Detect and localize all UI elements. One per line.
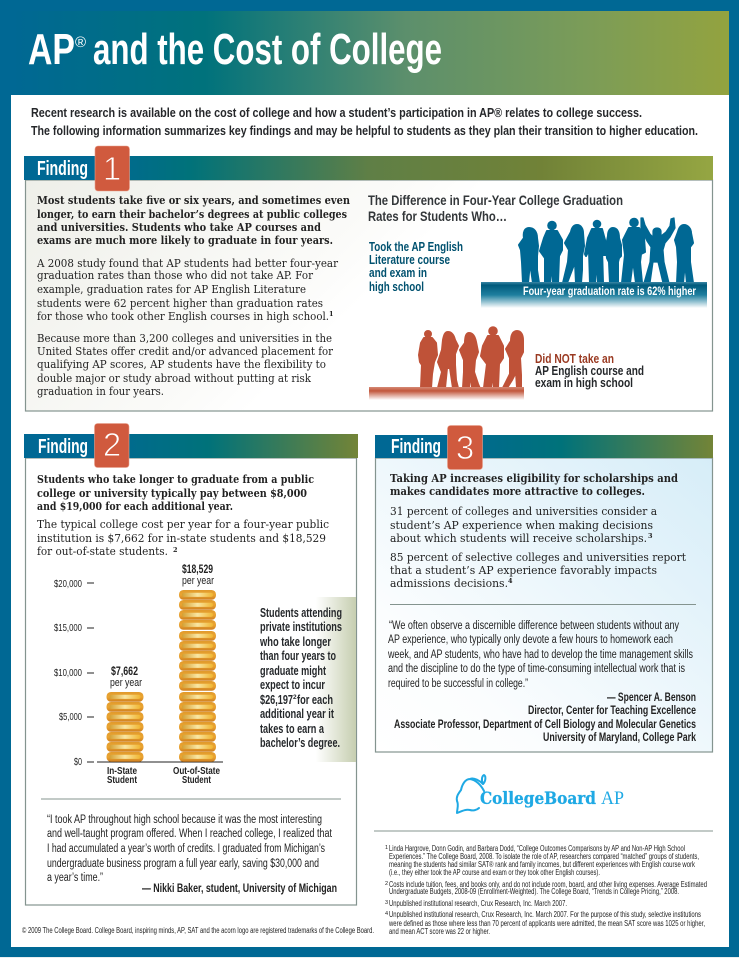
student quote: I had accumulated a year’s worth of credits. I graduated from Michigan’s xyxy=(47,843,325,855)
intro text xyxy=(31,105,698,138)
blue silhouettes of AP students xyxy=(519,218,693,283)
finding 2 label: Finding xyxy=(38,436,88,458)
finding 1 text: Because more than 3,200 colleges and universities in the xyxy=(37,332,332,345)
callout: private institutions: private institutions xyxy=(260,620,342,634)
y axis labels: $20,000 xyxy=(54,578,82,590)
finding 2 text: for out-of-state students. xyxy=(37,545,168,558)
red silhouettes of non-AP students xyxy=(419,327,523,392)
finding 1 text: and universities. Students who take AP courses and xyxy=(37,221,321,234)
header banner: and the Cost of College xyxy=(93,25,442,74)
footnotes: 4 xyxy=(385,911,388,917)
copyright line: © 2009 The College Board. College Board, inspiring minds, AP, SAT and the acorn logo are registered trademarks of the College Board. xyxy=(22,926,374,935)
finding 3 text: makes candidates more attractive to colleges. xyxy=(390,485,645,498)
label: took AP: and exam in xyxy=(369,265,427,280)
student quote: undergraduate business program a full year early, saving $30,000 and xyxy=(47,858,319,870)
out-of-state value xyxy=(182,562,214,587)
finding 3 number badge: 3 xyxy=(456,429,474,466)
callout: private institutions xyxy=(255,597,356,762)
label: did not take AP xyxy=(535,351,644,390)
blue graduation rate bar xyxy=(481,282,707,308)
callout: private institutions: $26,197 xyxy=(260,693,293,707)
header banner xyxy=(11,11,729,95)
y axis labels: $10,000 xyxy=(54,667,82,679)
finding 3 text: admissions decisions. xyxy=(390,577,508,590)
y axis labels xyxy=(54,578,82,768)
graduation graphic heading xyxy=(368,192,623,224)
x axis labels: Out-of-State xyxy=(173,765,220,777)
finding 1 text: double major or study abroad without putting at risk xyxy=(37,372,311,385)
in-state value: per year xyxy=(110,677,142,689)
finding 3 text: that a student’s AP experience favorably impacts xyxy=(390,564,657,577)
icon: acorn outline xyxy=(457,775,485,813)
finding 1 text: graduation rates than those who did not take AP. For xyxy=(37,269,314,282)
panel: finding 1 xyxy=(24,146,713,411)
callout: private institutions: additional year it xyxy=(260,707,335,721)
finding 2 number badge: 2 xyxy=(103,426,121,463)
in-state coin stack xyxy=(106,692,144,762)
callout: private institutions: bachelor’s degree. xyxy=(260,736,340,750)
finding 2 text: The typical college cost per year for a four-year public xyxy=(37,518,329,531)
footnotes: 3 xyxy=(385,900,388,906)
finding 1 header bar xyxy=(24,156,713,180)
finding 1 text: longer, to earn their bachelor’s degrees at public colleges xyxy=(37,208,347,221)
graduation graphic heading: The Difference in Four-Year College Graduation xyxy=(368,192,623,208)
title: AP xyxy=(28,25,75,74)
logo: College Board AP: AP xyxy=(601,788,624,809)
finding 3 text: student’s AP experience when making decisions xyxy=(390,519,653,532)
finding 3 text: 85 percent of selective colleges and universities report xyxy=(390,551,687,564)
finding 1 number badge xyxy=(95,146,130,191)
finding 3 text xyxy=(390,472,687,590)
footnotes: (i.e., they either took the AP course and exam or they took other English courses). xyxy=(389,868,600,877)
finding 3 text: 3 xyxy=(648,532,653,540)
professor quote: required to be successful in college.” xyxy=(388,678,528,690)
finding 3 text: 31 percent of colleges and universities consider a xyxy=(390,505,657,518)
finding 3 header bar xyxy=(375,435,713,458)
finding 3 text: 4 xyxy=(508,577,513,585)
finding 2 text: Students who take longer to graduate from a public xyxy=(37,473,314,486)
finding 1 text: students were 62 percent higher than graduation rates xyxy=(37,297,323,310)
callout: private institutions: takes to earn a xyxy=(260,722,325,736)
footnotes xyxy=(385,844,707,936)
out-of-state coin stack xyxy=(179,590,216,762)
y axis labels: $15,000 xyxy=(54,622,82,634)
y axis labels: $5,000 xyxy=(59,711,82,723)
callout: private institutions: Students attending xyxy=(260,606,342,620)
out-of-state value: per year xyxy=(182,575,214,587)
x axis labels: Student xyxy=(182,774,211,786)
finding 2 text: 2 xyxy=(173,546,178,554)
finding 3 text: about which students will receive scholarships. xyxy=(390,532,647,545)
finding 1 text: 1 xyxy=(329,310,334,318)
professor quote: University of Maryland, College Park xyxy=(543,732,696,744)
finding 3 number badge xyxy=(448,426,482,470)
graduation graphic heading: Rates for Students Who… xyxy=(368,208,507,224)
finding 1 text: qualifying AP scores, AP students have the flexibility to xyxy=(37,358,326,371)
footnotes: Unpublished institutional research, Crux Research, Inc. March 2007. xyxy=(389,899,567,908)
finding 1 text: graduation in four years. xyxy=(37,385,164,398)
finding 2 text xyxy=(37,473,329,558)
in-state value xyxy=(110,664,142,689)
footnotes: and mean ACT score was 22 or higher. xyxy=(389,927,490,936)
label: took AP: Literature course xyxy=(369,252,450,267)
label: took AP: high school xyxy=(369,279,424,294)
professor quote xyxy=(387,620,696,744)
label: did not take AP: Did NOT take an xyxy=(535,351,614,366)
y axis labels: $0 xyxy=(74,756,82,768)
finding 1 text xyxy=(36,194,350,398)
callout: private institutions: who take longer xyxy=(259,635,331,649)
x axis labels: Student xyxy=(107,774,137,786)
header banner: ® xyxy=(75,34,86,51)
callout: private institutions: graduate might xyxy=(260,664,327,678)
out-of-state value: $18,529 xyxy=(182,562,213,576)
logo wordmark: CollegeBoard xyxy=(480,789,596,809)
label: did not take AP: exam in high school xyxy=(535,375,633,390)
finding 1 text: exams are much more likely to graduate in four years. xyxy=(37,234,333,247)
callout: private institutions: 2 xyxy=(293,694,297,701)
panel: finding 2 xyxy=(24,424,358,905)
student quote: and well-taught program offered. When I reached college, I realized that xyxy=(47,828,333,840)
finding 2 text: institution is $7,662 for in-state students and $18,529 xyxy=(37,532,326,545)
finding 1 text: Most students take five or six years, and sometimes even xyxy=(37,194,350,207)
label: took AP: Took the AP English xyxy=(369,239,463,254)
panel: finding 3 xyxy=(375,426,713,752)
finding 1 text: United States offer credit and/or advanced placement for xyxy=(37,345,334,358)
student quote xyxy=(47,814,337,895)
red ground bar xyxy=(369,387,524,400)
finding 1 text: A 2008 study found that AP students had better four-year xyxy=(36,257,339,270)
professor quote: — Spencer A. Benson xyxy=(607,692,696,704)
callout: private institutions: for each xyxy=(297,693,333,707)
bar chart: college cost per year xyxy=(54,562,223,786)
in-state value: $7,662 xyxy=(111,664,138,678)
finding 1 text: example, graduation rates for AP English Literature xyxy=(37,283,306,296)
x axis labels: In-State xyxy=(107,765,137,777)
finding 3 label: Finding xyxy=(391,436,441,458)
finding 1 label: Finding xyxy=(37,158,88,180)
label: did not take AP: AP English course and xyxy=(535,363,644,378)
finding 2 text: and $19,000 for each additional year. xyxy=(37,500,233,513)
logo: College Board AP xyxy=(457,775,624,813)
finding 2 number badge xyxy=(94,424,129,468)
callout: private institutions: expect to incur xyxy=(260,678,325,692)
student quote: “I took AP throughout high school because it was the most interesting xyxy=(47,814,322,826)
student quote: — Nikki Baker, student, University of Michigan xyxy=(142,883,337,895)
x axis labels xyxy=(107,765,220,786)
label: took AP xyxy=(369,239,463,294)
finding 2 header bar xyxy=(24,434,358,458)
finding 1 text: for those who took other English courses in high school. xyxy=(37,310,329,323)
finding 2 text: college or university typically pay between $8,000 xyxy=(37,487,307,500)
student quote: a year’s time.” xyxy=(47,872,103,884)
callout: private institutions: than four years to xyxy=(260,649,336,663)
footnotes: 1 xyxy=(385,845,388,851)
finding 1 number badge: 1 xyxy=(103,150,121,187)
footnotes: 2 xyxy=(385,881,388,887)
finding 3 text: Taking AP increases eligibility for scholarships and xyxy=(390,472,678,485)
